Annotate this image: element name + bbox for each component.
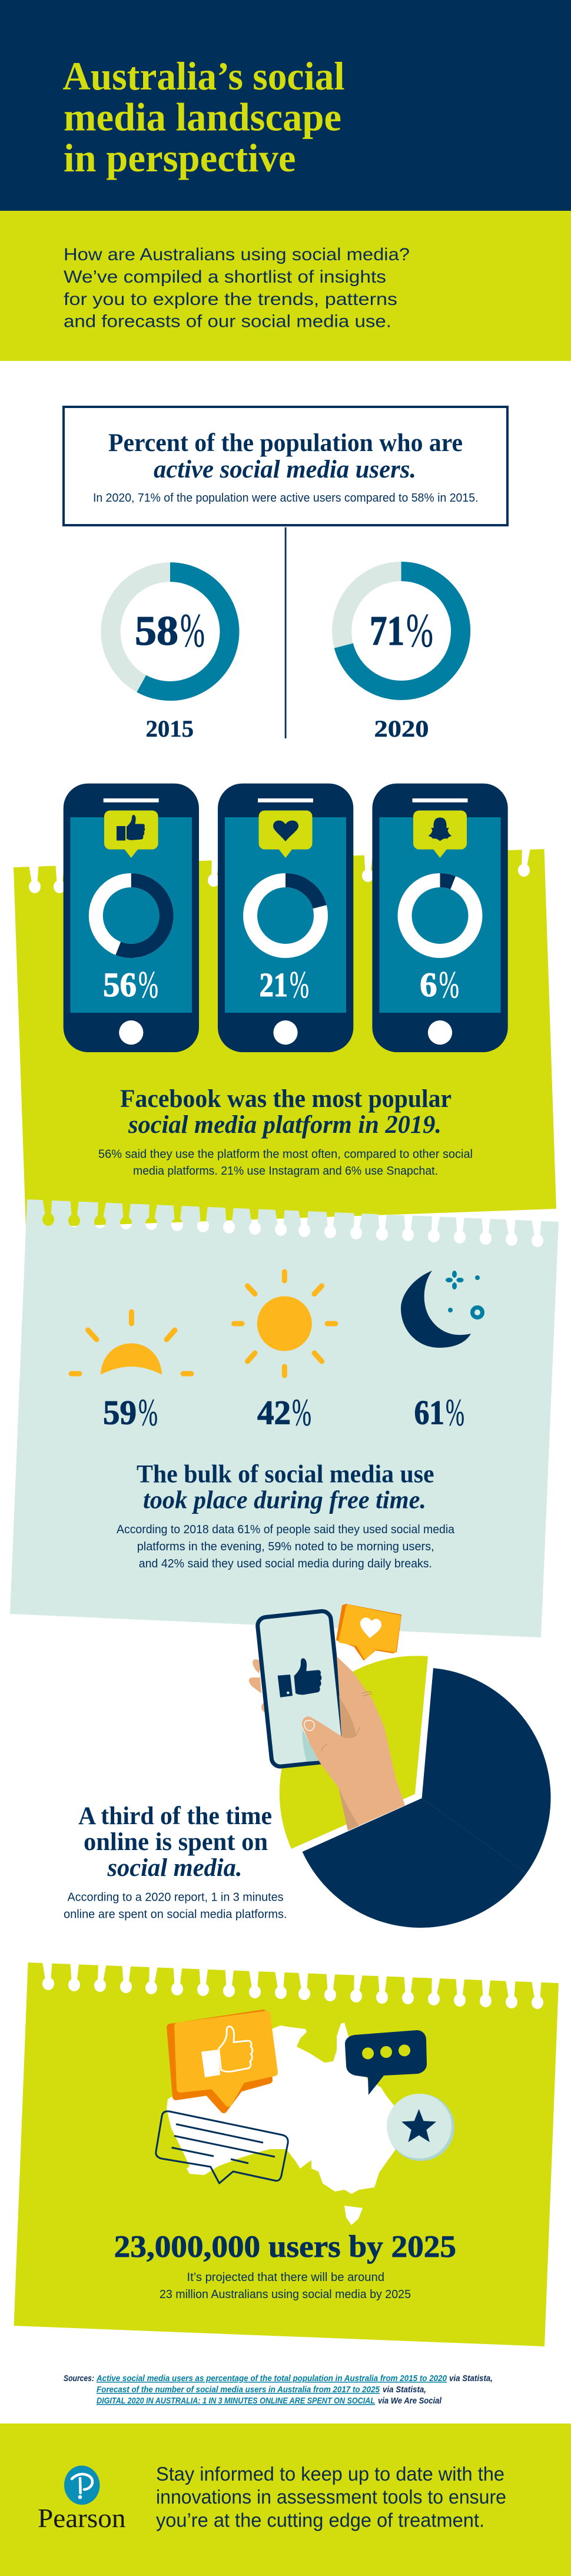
title: in perspective — [64, 135, 296, 180]
stat: morning 59% — [103, 1391, 158, 1434]
lime torn sheet — [14, 1962, 559, 2346]
third of time heading: social media. — [107, 1854, 243, 1882]
free time text: platforms in the evening, 59% noted to be morning users, — [137, 1540, 434, 1553]
title: media landscape — [64, 94, 341, 139]
illustration: hand holding phone — [249, 1610, 405, 1831]
sources: via Statista, — [383, 2385, 426, 2395]
donut chart: 2015: 58 — [135, 608, 178, 654]
phone: Facebook 56%: 56 — [103, 966, 137, 1004]
heading box: Percent of the population who are — [108, 429, 463, 457]
third of time text — [64, 1891, 287, 1921]
panel: users by 2025 — [14, 1962, 559, 2346]
third of time heading — [78, 1802, 272, 1882]
phone: Instagram 21% — [218, 784, 353, 1052]
thumb nail — [304, 1720, 314, 1730]
platform heading: social media platform in 2019. — [128, 1111, 441, 1139]
logo: Pearson: Pearson — [38, 2503, 126, 2533]
heading box: active social media users. — [154, 456, 416, 483]
platform text — [98, 1148, 473, 1178]
icon: sunrise — [71, 1312, 191, 1375]
donut chart: 2015 — [111, 572, 230, 742]
phone: Instagram 21%: % — [290, 963, 309, 1006]
phone: Instagram 21%: 21 — [260, 966, 288, 1004]
heading box: In 2020, 71% of the population were active users compared to 58% in 2015. — [93, 492, 478, 505]
free time heading — [137, 1461, 434, 1514]
sources: Sources: — [64, 2373, 94, 2383]
stat: morning 59%: 59 — [103, 1394, 137, 1432]
forecast heading: 23,000,000 users by 2025 — [114, 2230, 456, 2264]
intro text: How are Australians using social media? — [64, 245, 410, 264]
third of time heading: A third of the time — [78, 1802, 272, 1830]
sources: Forecast of the number of social media users in Australia from 2017 to 2025 — [97, 2385, 380, 2395]
sources: Active social media users as percentage of the total population in Australia from 2015 to 2020 — [96, 2373, 447, 2383]
footer panel — [0, 2424, 571, 2576]
stat: evening 61% — [414, 1391, 464, 1434]
icon: outlined message bubble — [156, 2111, 288, 2183]
third of time text: online are spent on social media platforms. — [64, 1908, 287, 1921]
donut chart: 2020 — [342, 571, 461, 742]
stat: daily breaks 42% — [257, 1391, 311, 1434]
icon: navy chat bubble — [345, 2030, 427, 2095]
forecast text — [160, 2271, 411, 2301]
divider line — [285, 528, 286, 738]
free time text: and 42% said they used social media during daily breaks. — [139, 1557, 432, 1570]
stat: evening 61%: % — [446, 1391, 464, 1434]
intro text — [64, 245, 410, 331]
icon: thumbs up speech bubble — [170, 2013, 274, 2110]
platform heading: Facebook was the most popular — [120, 1085, 452, 1113]
footer text: innovations in assessment tools to ensure — [156, 2486, 506, 2508]
free time heading: The bulk of social media use — [137, 1461, 434, 1488]
icon: heart bubble — [337, 1604, 401, 1660]
donut chart: 2015: 2015 — [146, 715, 194, 742]
icon: thumbs up on screen — [278, 1657, 323, 1698]
footer text — [156, 2463, 506, 2531]
intro text: We’ve compiled a shortlist of insights — [64, 267, 386, 287]
icon: star badge — [387, 2094, 454, 2161]
forecast text: It’s projected that there will be around — [187, 2271, 384, 2284]
icon: ghost bubble — [413, 810, 467, 858]
phone: Snapchat 6% — [372, 784, 508, 1052]
title: Australia’s social — [62, 54, 345, 98]
heading box — [64, 407, 507, 525]
logo: Pearson — [38, 2466, 126, 2533]
donut chart: 2020: % — [406, 604, 433, 657]
free time text: According to 2018 data 61% of people said they used social media — [117, 1523, 455, 1536]
header panel — [0, 0, 571, 211]
phone: Facebook 56% — [64, 784, 199, 1052]
phone: Facebook 56%: % — [138, 963, 158, 1006]
forecast text: 23 million Australians using social media by 2025 — [160, 2288, 411, 2301]
third of time text: According to a 2020 report, 1 in 3 minutes — [67, 1891, 284, 1904]
platform heading — [120, 1085, 452, 1139]
panel: free time use — [10, 1199, 559, 1637]
phone: Snapchat 6%: % — [439, 963, 459, 1006]
free time text — [117, 1523, 455, 1570]
footer text: Stay informed to keep up to date with the — [156, 2463, 504, 2485]
platform text: 56% said they use the platform the most often, compared to other social — [98, 1148, 473, 1161]
panel: active social media users — [64, 407, 507, 742]
map: Australia — [167, 2023, 400, 2225]
donut chart: 2020: 71 — [370, 608, 404, 654]
phone: Snapchat 6%: 6 — [420, 966, 437, 1004]
intro text: and forecasts of our social media use. — [64, 312, 391, 331]
stat: daily breaks 42%: 42 — [257, 1394, 291, 1432]
pie chart — [280, 1656, 551, 1928]
free time heading: took place during free time. — [143, 1486, 426, 1514]
icon: thumbs up bubble — [104, 810, 158, 858]
donut chart: 2015: % — [180, 604, 205, 657]
intro text: for you to explore the trends, patterns — [64, 290, 397, 309]
icon: moon and stars — [401, 1271, 483, 1348]
footer text: you’re at the cutting edge of treatment. — [156, 2509, 484, 2531]
sources: via Statista, — [449, 2373, 493, 2383]
platform text: media platforms. 21% use Instagram and 6% use Snapchat. — [133, 1165, 438, 1178]
third of time heading: online is spent on — [84, 1828, 268, 1856]
sources: via We Are Social — [378, 2396, 442, 2406]
intro panel — [0, 211, 571, 361]
pale torn sheet — [10, 1199, 559, 1637]
icon: heart bubble — [259, 810, 312, 858]
panel: most popular platform — [14, 784, 556, 1228]
sources — [64, 2373, 493, 2406]
donut chart: 2020: 2020 — [374, 715, 429, 742]
panel: a third of time online — [64, 1604, 551, 1928]
torn lime sheet — [14, 849, 556, 1228]
stat: morning 59%: % — [138, 1391, 158, 1434]
stat: daily breaks 42%: % — [292, 1391, 311, 1434]
sources: DIGITAL 2020 IN AUSTRALIA: 1 IN 3 MINUTES ONLINE ARE SPENT ON SOCIAL — [97, 2396, 375, 2406]
icon: sun — [234, 1272, 336, 1375]
title — [62, 54, 345, 180]
stat: evening 61%: 61 — [414, 1394, 444, 1432]
